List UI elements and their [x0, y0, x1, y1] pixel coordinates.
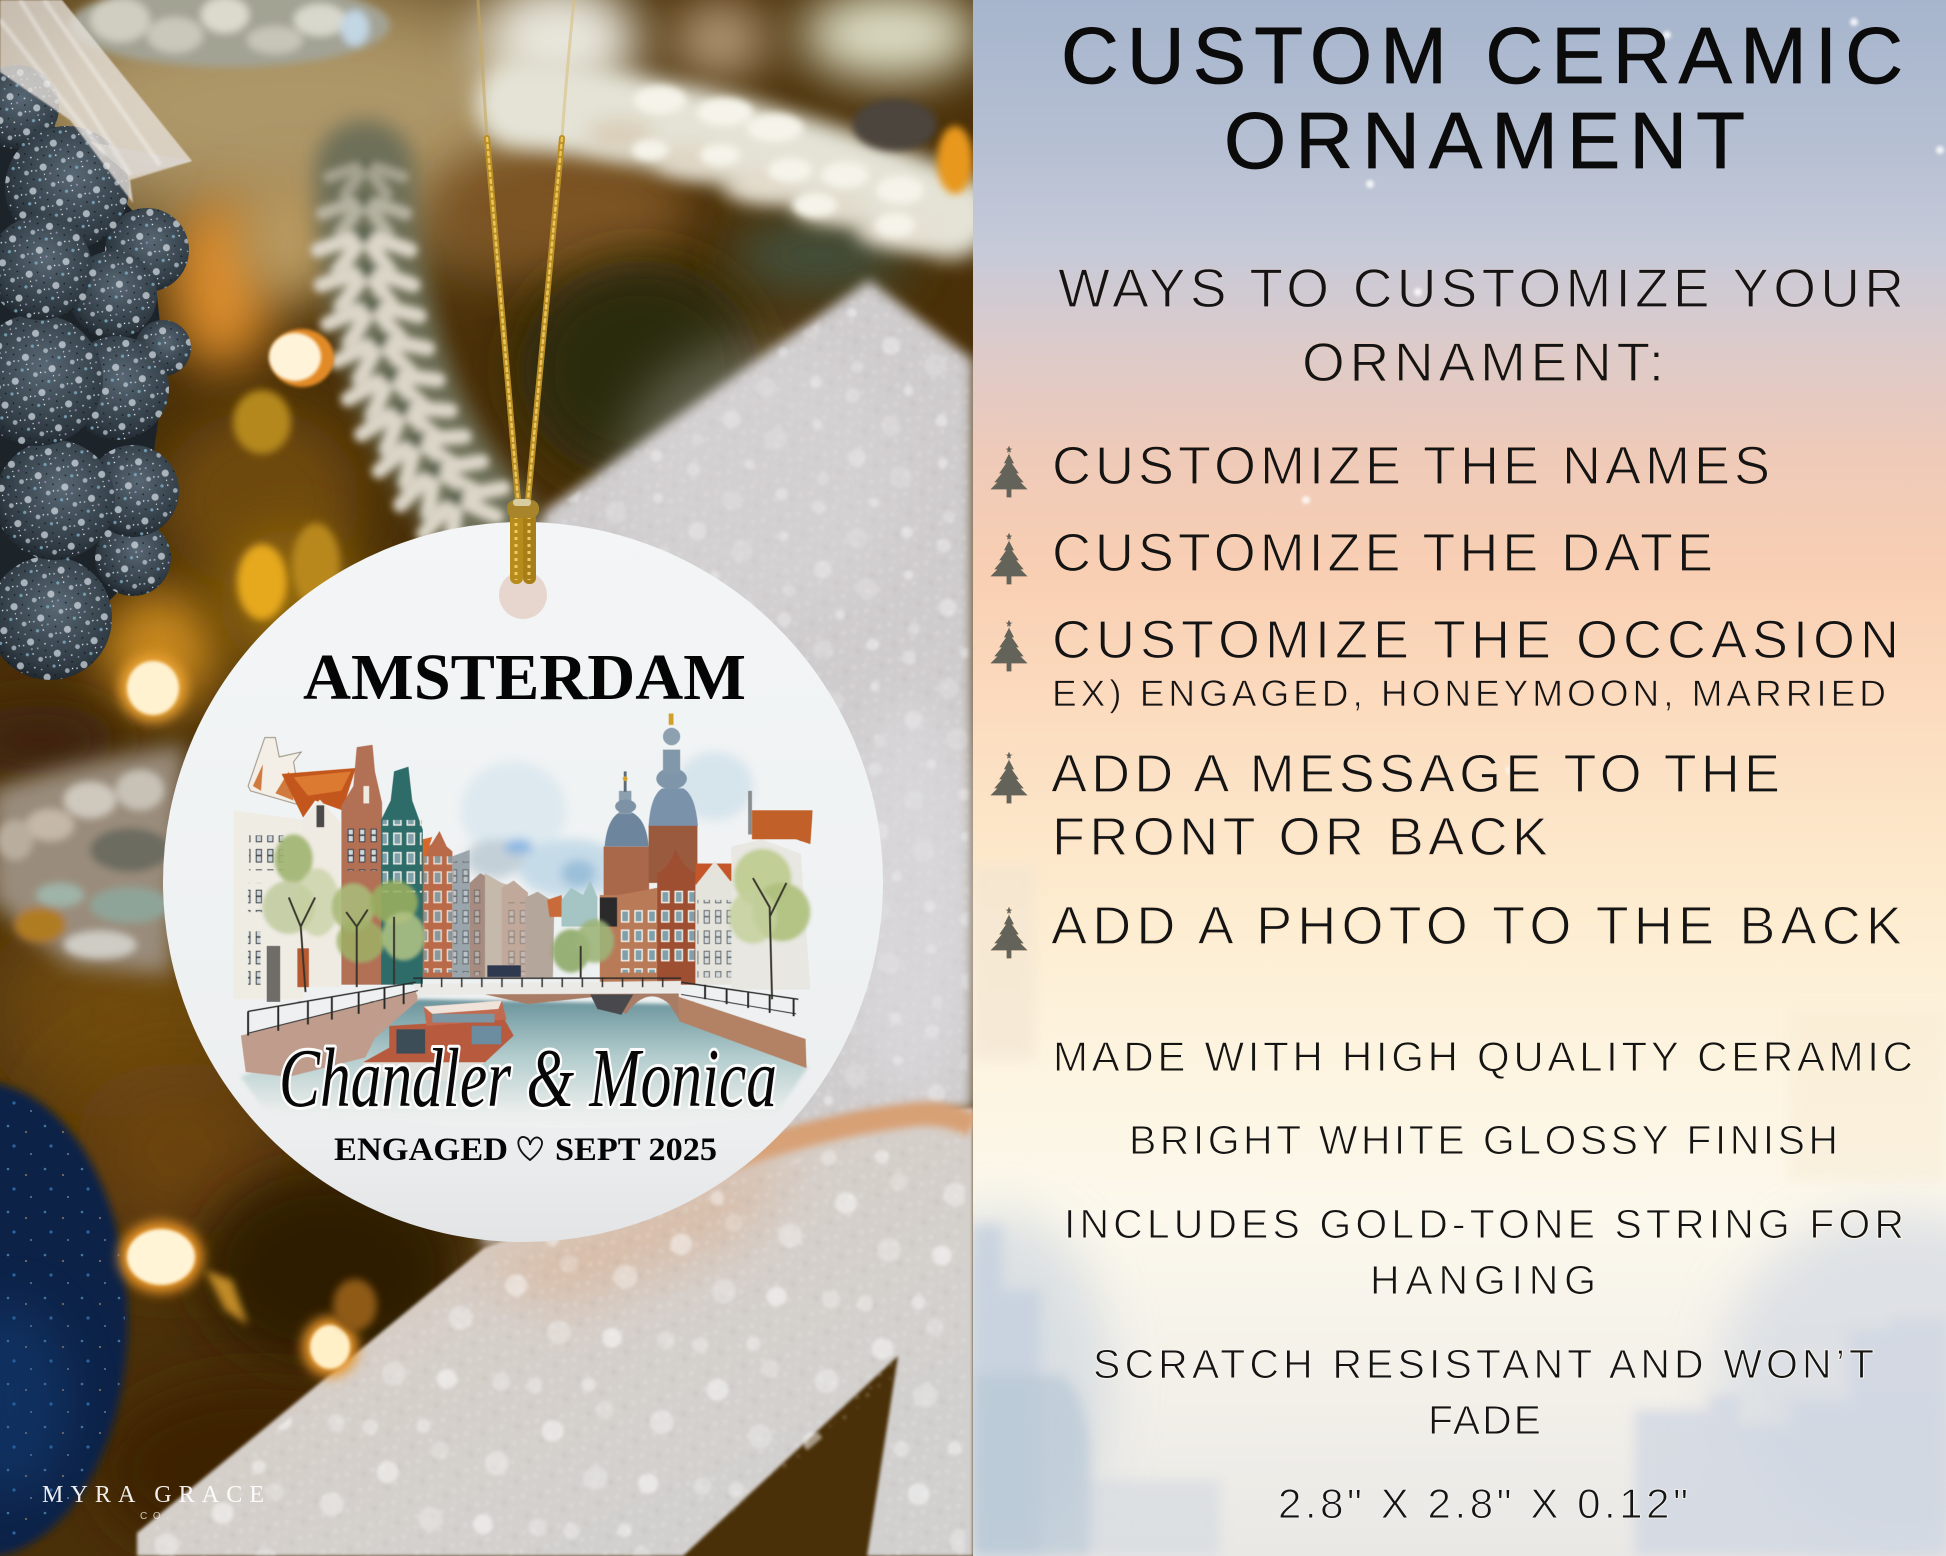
title: ORNAMENT [1224, 96, 1745, 185]
brand watermark: MYRA GRACE [42, 1482, 264, 1508]
title: CUSTOM CERAMIC [1061, 11, 1903, 100]
white tulle ribbon [0, 0, 192, 203]
item: occasion [989, 610, 1899, 714]
photo background [0, 0, 973, 1556]
panel: product details [890, 0, 1946, 1556]
feature: durability: SCRATCH RESISTANT AND WON’T [1093, 1341, 1874, 1387]
sky wash [461, 752, 753, 897]
icon: tree [989, 905, 1029, 959]
script names: Chandler & Monica: Chandler & Monica [279, 1032, 777, 1125]
item: photo: ADD A PHOTO TO THE BACK [1051, 896, 1902, 956]
feature: durability [1093, 1341, 1874, 1443]
icon: tree [989, 750, 1029, 804]
branch: centre hanging fir [318, 165, 514, 552]
panel background [890, 0, 1946, 1556]
frosted fir branches [0, 0, 980, 975]
icon: tree [989, 444, 1029, 498]
feature: string [1064, 1201, 1904, 1303]
left canal houses [234, 738, 597, 1002]
bokeh lights [119, 329, 377, 1377]
blue glitter ball [0, 1082, 128, 1556]
ornament disc [163, 522, 883, 1242]
caption: ENGAGED heart SEPT 2025: SEPT 2025 [555, 1132, 717, 1168]
customization list [989, 436, 1902, 959]
item: occasion: CUSTOMIZE THE OCCASION [1052, 610, 1899, 670]
feature: string: HANGING [1370, 1257, 1596, 1303]
string hole [499, 571, 547, 619]
string loop [507, 499, 539, 584]
item: message: FRONT OR BACK [1052, 807, 1548, 867]
item: date: CUSTOMIZE THE DATE [1052, 523, 1713, 583]
canal railings [248, 982, 798, 1036]
item: message: ADD A MESSAGE TO THE [1051, 744, 1780, 804]
heading: AMSTERDAM: AMSTERDAM [303, 641, 746, 714]
branch: top left frost [70, 0, 390, 67]
street trees [262, 834, 810, 973]
canal water [241, 999, 808, 1128]
brand watermark: CO. [140, 1511, 169, 1522]
item: message [989, 744, 1780, 867]
feature: string: INCLUDES GOLD-TONE STRING FOR [1064, 1201, 1904, 1247]
subheading [1058, 257, 1904, 393]
icon: tree [989, 531, 1029, 585]
feature: dimensions: 2.8" X 2.8" X 0.12" [1278, 1480, 1688, 1527]
icon: heart [518, 1137, 542, 1160]
title [1061, 11, 1903, 185]
silver glitter fabric upper [430, 280, 980, 1248]
icon: tree [989, 618, 1029, 672]
feature: durability: FADE [1428, 1397, 1541, 1443]
branch: lower left frost [0, 745, 185, 975]
branch: top right frost [480, 0, 980, 248]
silver glitter fabric lower [137, 1108, 973, 1556]
subheading: WAYS TO CUSTOMIZE YOUR [1058, 257, 1904, 319]
feature: finish: BRIGHT WHITE GLOSSY FINISH [1129, 1117, 1838, 1163]
caption: ENGAGED heart SEPT 2025: ENGAGED [334, 1132, 508, 1168]
subheading: ORNAMENT: [1302, 331, 1664, 393]
product features [1053, 1033, 1913, 1527]
tree trunks [289, 878, 786, 999]
brand watermark [42, 1482, 264, 1522]
silver glitter beads cluster [0, 60, 200, 700]
right quay wall [679, 997, 807, 1068]
gold string top [478, 0, 574, 500]
caption: ENGAGED heart SEPT 2025 [334, 1132, 717, 1168]
church towers and right houses [600, 713, 813, 990]
left quay wall [241, 991, 418, 1077]
item: occasion: EX) ENGAGED, HONEYMOON, MARRIED [1052, 673, 1886, 714]
feature: material: MADE WITH HIGH QUALITY CERAMIC [1053, 1033, 1913, 1080]
panel: ornament photo [0, 0, 980, 1556]
watercolor Amsterdam canal scene [234, 713, 813, 1128]
bridge [413, 977, 681, 1019]
ceramic ornament [163, 499, 883, 1242]
canal boat [363, 1001, 514, 1082]
item: names: CUSTOMIZE THE NAMES [1052, 436, 1770, 496]
